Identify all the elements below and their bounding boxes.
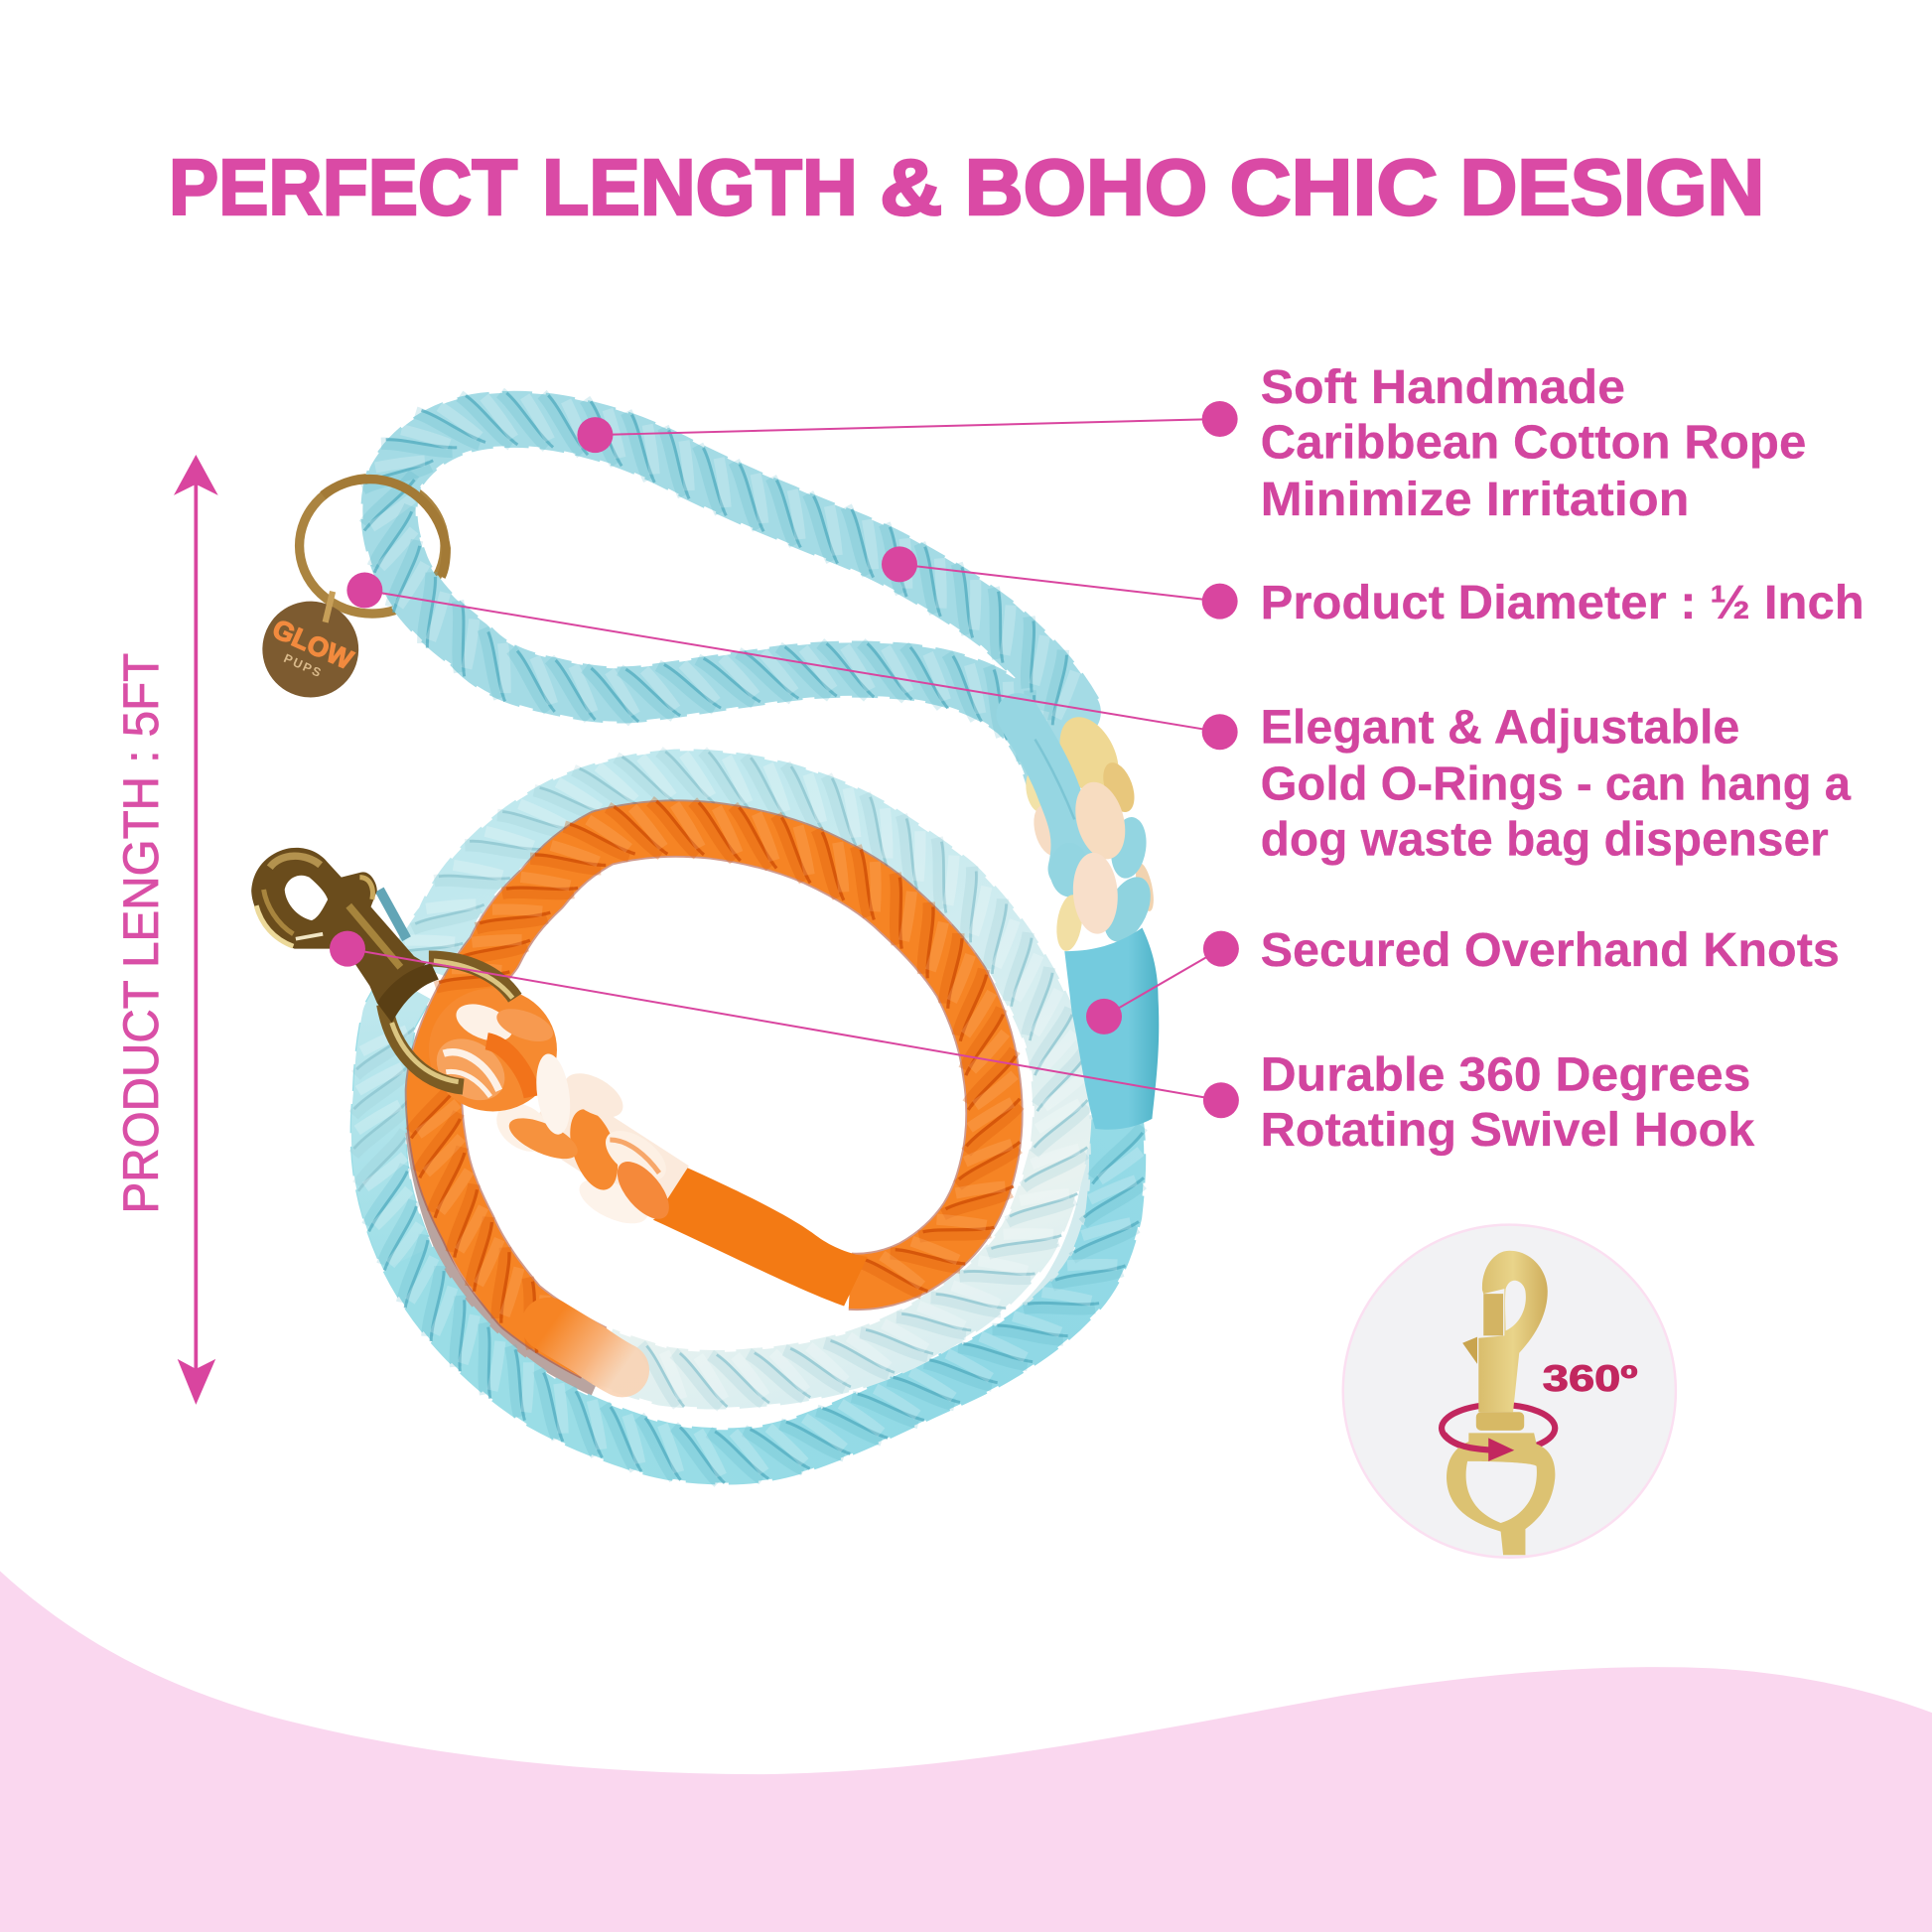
orange sleeve wrap [653,1165,868,1307]
label: o-rings: Elegant & Adjustable [1261,701,1739,754]
label: knots: Secured Overhand Knots [1261,924,1840,977]
label: o-rings: dog waste bag dispenser [1261,813,1829,866]
rope: middle coil [389,752,1089,1407]
background wave [0,1571,1932,1932]
swivel block [377,964,439,1023]
rope gap shading [409,1084,1092,1390]
title: & [880,143,942,231]
rope: orange coil [406,801,1020,1370]
rope knot [425,988,575,1137]
vertical length label: PRODUCT LENGTH : 5FT [113,653,169,1213]
title: DESIGN [1460,143,1764,231]
swivel loop [1447,1433,1555,1555]
label: rope material: Soft Handmade [1261,361,1625,414]
tag [247,586,374,713]
orange strand [561,1103,626,1196]
d-ring [384,959,515,1087]
leash illustration [247,393,1160,1483]
title: CHIC [1230,143,1438,231]
inset: 360 swivel hook [1343,1225,1676,1558]
label: swivel hook: Rotating Swivel Hook [1261,1104,1755,1157]
lower white strand [573,1171,654,1233]
rotation arrow front [1445,1435,1493,1450]
label: diameter: Product Diameter : ½ Inch [1261,577,1864,629]
white lower-left strand [487,1093,560,1162]
orange lower-left stripe [503,1110,583,1167]
hook body [251,848,426,1003]
gold o-ring back [300,479,445,614]
white upper strand [558,1064,630,1126]
white striped strand [597,1121,675,1190]
label: o-rings: Gold O-Rings - can hang a [1261,758,1852,810]
title: LENGTH [542,143,858,231]
hook rim highlight [256,905,293,946]
rope: outer lower coil [353,986,1145,1483]
orange and white braid [487,1064,678,1233]
label: rope material: Caribbean Cotton Rope [1261,417,1806,470]
tag: PUPS [282,651,325,681]
rope: handle loop [360,393,1095,782]
360 label: 360º [1543,1357,1637,1399]
braid white base [542,1109,671,1192]
length arrow [174,455,218,1405]
title: BOHO [965,143,1207,231]
hook body [1478,1251,1548,1412]
title [169,143,1764,231]
tag: GLOW [268,613,357,675]
blue reflection [379,890,407,939]
blue sleeve wrap [1064,928,1159,1130]
braided splice with cream strands [1018,708,1160,953]
callout dots [330,401,1239,1118]
label: o-rings [1261,701,1852,866]
o-ring front arc [323,480,446,577]
orange stripe [608,1153,678,1228]
tag link [326,592,333,622]
leader lines [347,419,1221,1100]
label: rope material: Minimize Irritation [1261,474,1690,526]
title: PERFECT [169,143,517,231]
thumb tab [1462,1337,1477,1364]
label: swivel hook: Durable 360 Degrees [1261,1048,1751,1101]
label: rope material [1261,361,1806,526]
hook gate [1483,1294,1503,1335]
swivel snap hook [251,848,515,1087]
collar [1476,1412,1524,1431]
stripe on white strand [610,1140,659,1173]
rotation ring back [1442,1405,1555,1451]
label: swivel hook [1261,1048,1755,1157]
